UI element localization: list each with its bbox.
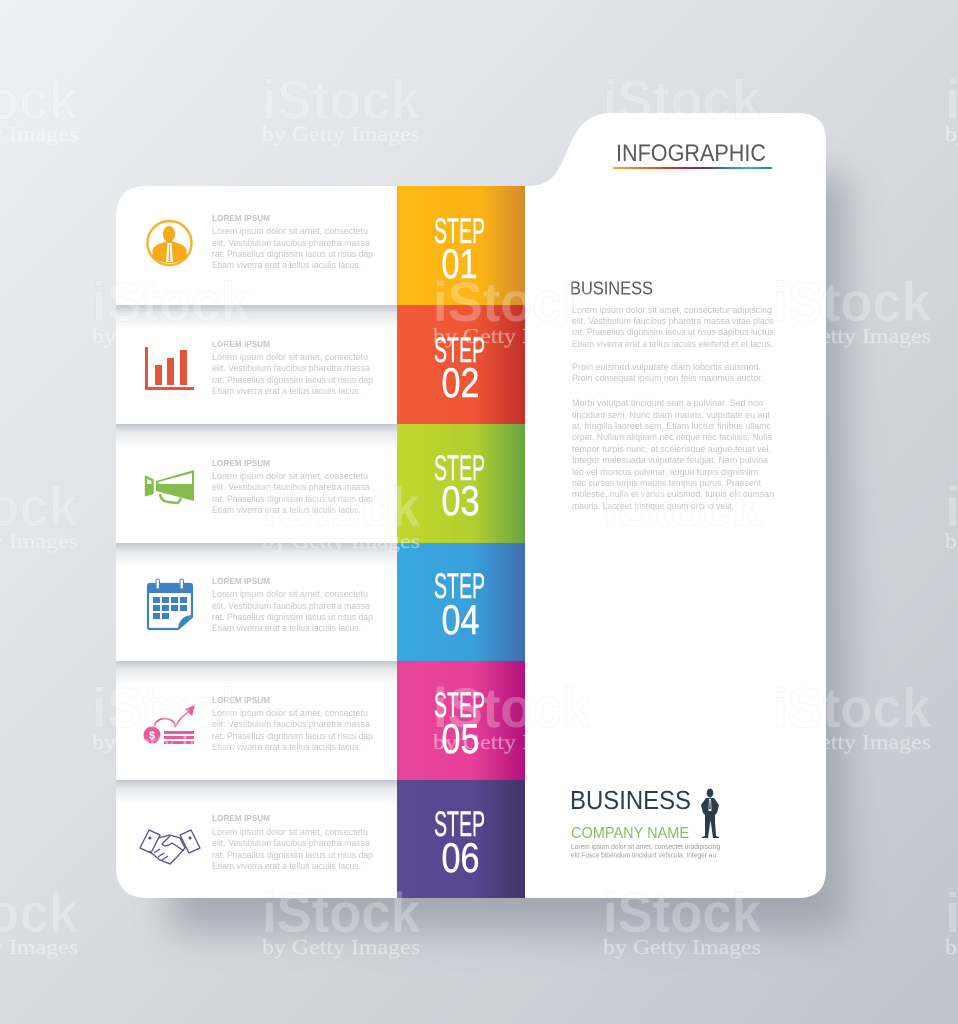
watermarks: by Getty Images: [262, 935, 420, 959]
watermarks: iStock: [92, 676, 251, 739]
company block: elit.Fusce bibendum tincidunt vehicula. Integer au.: [571, 852, 718, 860]
watermarks: by Getty Images: [262, 529, 420, 553]
card: [116, 113, 826, 898]
text: step 03: Lorem ipsum dolor sit amet, consectetu: [212, 471, 368, 481]
text: step 04: Etiam viverra erat a tellus iaculis lacus.: [212, 623, 361, 633]
step 05 column: 05: [442, 715, 480, 762]
watermarks: by Getty Images: [603, 529, 761, 553]
watermarks: by Getty Images: [773, 324, 931, 348]
text: business description: Lorem ipsum dolor sit amet, consectetur adipiscing: [572, 305, 772, 315]
text: step 06: Lorem ipsum dolor sit amet, consectetu: [212, 827, 368, 837]
text: business description: tincidunt sem. Nunc diam mauris, vulputate eu ant: [572, 410, 770, 420]
text: step 05: Lorem ipsum dolor sit amet, consectetu: [212, 708, 368, 718]
company block: Lorem ipsum dolor sit amet, consectet uradipiscing: [571, 844, 720, 851]
watermarks: by Getty Images: [433, 324, 591, 348]
watermarks: by Getty Images: [773, 730, 931, 754]
text: step 05: [212, 695, 373, 752]
text: step 04: Lorem ipsum dolor sit amet, consectetu: [212, 589, 368, 599]
text: step 04: elit. Vestibulum faucibus pharetra massa: [212, 601, 370, 611]
text: step 01: rat. Phasellus dignissim lacus ut risus dap: [212, 249, 373, 259]
text: business description: tempor turpis nunc, at scelerisque augue feuat vel.: [572, 444, 771, 454]
watermarks: by Getty Images: [603, 935, 761, 959]
step 02 column: STEP: [434, 331, 485, 370]
text: step 04: LOREM IPSUM: [212, 576, 270, 586]
company block: COMPANY NAME: [571, 825, 689, 842]
text: business description: mauris. Laoreet tristique quam orci id velit.: [572, 501, 734, 511]
text: step 02: [212, 339, 373, 396]
title: infographic: INFOGRAPHIC: [616, 140, 766, 167]
step 03 column: STEP: [434, 449, 485, 488]
icon: money growth arrow: [144, 705, 195, 744]
watermarks: iStock: [773, 270, 932, 333]
watermarks: iStock: [603, 68, 762, 131]
step 06 column: 06: [442, 834, 480, 881]
watermarks: iStock: [603, 475, 762, 538]
text: step 01: elit. Vestibulum faucibus pharetra massa: [212, 238, 370, 248]
text: step 03: [212, 458, 373, 515]
text: step 03: Etiam viverra erat a tellus iaculis lacus.: [212, 505, 361, 515]
heading: business: BUSINESS: [570, 278, 653, 298]
icon: businessman in circle: [148, 221, 192, 265]
text: step 06: rat. Phasellus dignissim lacus ut risus dap: [212, 850, 373, 860]
text: step 05: elit. Vestibulum faucibus pharetra massa: [212, 719, 370, 729]
watermarks: iStock: [262, 68, 421, 131]
text: step 01: [212, 213, 373, 270]
text: step 02: elit. Vestibulum faucibus pharetra massa: [212, 363, 370, 373]
step 04 column: STEP: [434, 567, 485, 606]
text: step 02: LOREM IPSUM: [212, 339, 270, 349]
watermarks: iStock: [603, 881, 762, 944]
text: step 03: rat. Phasellus dignissim lacus ut risus dap: [212, 494, 373, 504]
text: step 02: Lorem ipsum dolor sit amet, consectetu: [212, 352, 368, 362]
text: step 01: LOREM IPSUM: [212, 213, 270, 223]
text: business description: Proin consequat ipsum non felis maximus auctor.: [572, 373, 763, 383]
text: step 05: rat. Phasellus dignissim lacus ut risus dap: [212, 731, 373, 741]
text: business description: leo vel rhoncus pulvinar, augue turpis dignissim: [572, 467, 758, 477]
text: step 04: rat. Phasellus dignissim lacus ut risus dap: [212, 612, 373, 622]
step 05 column: [397, 661, 525, 780]
text: step 05: LOREM IPSUM: [212, 695, 270, 705]
step 04 column: 04: [442, 596, 480, 643]
text: step 06: [212, 813, 373, 871]
text: step 01: Lorem ipsum dolor sit amet, consectetu: [212, 226, 368, 236]
step 02 column: [397, 305, 525, 424]
row shadows: [116, 305, 397, 804]
step 06 column: STEP: [434, 805, 485, 844]
text: business description: Etiam viverra erat a tellus iaculis eleifend et et lacus.: [572, 339, 773, 349]
text: business description: orper. Nullam aliquam nec neque nec facilisis. Nulla: [572, 432, 773, 442]
watermarks: iStock: [433, 676, 592, 739]
company block: [570, 785, 720, 860]
text: step 06: Etiam viverra erat a tellus iaculis lacus.: [212, 861, 361, 871]
step 01 column: STEP: [434, 212, 485, 251]
card shadow: [170, 175, 846, 932]
text: business description: molestie, nulla et varius euismod, turpis elit cumsan: [572, 489, 774, 499]
watermarks: iStock: [262, 881, 421, 944]
company block: BUSINESS: [570, 785, 691, 815]
text: step 03: elit. Vestibulum faucibus pharetra massa: [212, 482, 370, 492]
icon: handshake: [140, 830, 200, 864]
watermarks: by Getty Images: [262, 122, 420, 146]
watermarks: iStock: [433, 270, 592, 333]
text: business description: Integer malesuada vulputate feugiat. Nam pulvina: [572, 455, 769, 465]
watermarks: by Getty Images: [433, 730, 591, 754]
icon: standing businessman: [701, 788, 719, 838]
text: business description: Proin euismod vulputate diam lobortis euismod.: [572, 362, 761, 372]
watermarks: iStock: [92, 270, 251, 333]
watermarks: iStock: [773, 676, 932, 739]
text: step 02: rat. Phasellus dignissim lacus ut risus dap: [212, 375, 373, 385]
text: business description: nec cursus turpis mauris tempus purus. Praesent: [572, 478, 761, 488]
step 01 column: 01: [442, 240, 478, 287]
text: step 02: Etiam viverra erat a tellus iaculis lacus.: [212, 386, 361, 396]
step 02 column: 02: [442, 359, 480, 406]
step 03 column: [397, 424, 525, 543]
text: step 03: LOREM IPSUM: [212, 458, 270, 468]
icon: calendar: [148, 579, 192, 629]
text: step 04: [212, 576, 373, 633]
text: business description: Morbi volutpat tincidunt sem a pulvinar. Sed non: [572, 398, 763, 408]
watermarks: by Getty Images: [92, 730, 250, 754]
icon: bar chart: [145, 347, 194, 390]
step 03 column: 03: [442, 477, 480, 524]
text: step 06: LOREM IPSUM: [212, 813, 270, 823]
watermarks: iStock: [262, 475, 421, 538]
step 01 column: [397, 186, 525, 305]
text: business description: rat. Phasellus dignissim lacus ut risus dapibus luctus.: [572, 327, 776, 337]
icon: money growth arrow: $: [149, 730, 155, 742]
watermarks: by Getty Images: [92, 324, 250, 348]
icon: megaphone: [146, 470, 194, 503]
text: business description: [572, 305, 776, 511]
text: step 06: elit. Vestibulum faucibus pharetra massa: [212, 838, 370, 848]
step 06 column: [397, 780, 525, 898]
watermarks: by Getty Images: [603, 122, 761, 146]
text: business description: elit. Vestibulum faucibus pharetra massa vitae place: [572, 316, 774, 326]
step 05 column: STEP: [434, 686, 485, 725]
text: step 01: Etiam viverra erat a tellus iaculis lacus.: [212, 260, 361, 270]
step 04 column: [397, 543, 525, 661]
text: step 05: Etiam viverra erat a tellus iaculis lacus.: [212, 742, 361, 752]
text: business description: at, fringilla laoreet sem. Etiam luctus finibus ullamc: [572, 421, 771, 431]
